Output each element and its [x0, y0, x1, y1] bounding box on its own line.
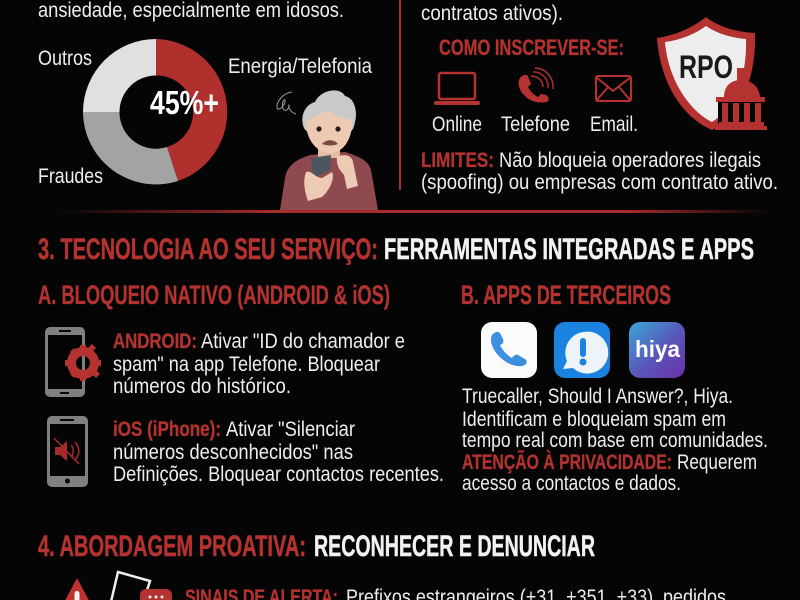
- icon: iPhone muted: [47, 416, 88, 487]
- icon: RPO shield with government building: [657, 17, 767, 130]
- privacy line 2: acesso a contactos e dados.: [462, 472, 681, 495]
- heading: section 4: [38, 530, 595, 563]
- heading part: red: 4. ABORDAGEM PROATIVA:: [38, 530, 306, 563]
- slice: Outros: [83, 39, 156, 112]
- privacy line 1: Requerem: [677, 451, 757, 474]
- icon: Truecaller app: [481, 322, 537, 378]
- heading: B: B. APPS DE TERCEIROS: [461, 280, 671, 310]
- apps line 1: Truecaller, Should I Answer?, Hiya.: [462, 385, 733, 408]
- icon: envelope: [596, 76, 631, 101]
- icon: android phone with gear: [45, 327, 101, 397]
- iOS line 2: números desconhecidos" nas: [113, 441, 353, 464]
- label: Online: Online: [432, 113, 482, 136]
- label: Energia/Telefonia: Energia/Telefonia: [228, 55, 372, 78]
- phone: [311, 155, 331, 178]
- icon: Hiya app: hiya: [635, 336, 680, 362]
- icon: Should I Answer app: [554, 322, 610, 378]
- alert signs text: [185, 586, 726, 600]
- face: [306, 110, 352, 153]
- horizontal divider: [60, 210, 770, 213]
- iOS label: iOS (iPhone):: [113, 418, 221, 441]
- android line 1: Ativar "ID do chamador e: [201, 330, 405, 353]
- android label: ANDROID:: [113, 330, 197, 353]
- building: [718, 100, 764, 124]
- label: Email: Email.: [590, 113, 638, 136]
- heading part: white: RECONHECER E DENUNCIAR: [314, 530, 595, 563]
- android text: [113, 330, 405, 398]
- text: active contracts: contratos ativos).: [421, 2, 563, 25]
- sweater: [280, 152, 378, 210]
- icon: warning triangle: [62, 578, 92, 600]
- iOS text: [113, 418, 444, 486]
- scribble: [277, 92, 296, 114]
- iOS line 1: Ativar "Silenciar: [226, 418, 355, 441]
- heading: section 3: [38, 233, 754, 266]
- limits label: LIMITES:: [421, 149, 494, 172]
- label: Telefone: Telefone: [501, 113, 570, 136]
- icon: Hiya app: [629, 322, 685, 378]
- heading part: red: 3. TECNOLOGIA AO SEU SERVIÇO:: [38, 233, 378, 266]
- icon: telephone: [519, 68, 553, 103]
- vertical divider: [399, 0, 401, 190]
- limits line 1: Não bloqueia operadores ilegais: [499, 149, 761, 172]
- apps line 2: Identificam e bloqueiam spam em: [462, 408, 726, 431]
- donut value: 45%+: [150, 84, 219, 121]
- icon: laptop online: [436, 73, 478, 103]
- label: Outros: Outros: [38, 47, 92, 70]
- privacy label: ATENÇÃO À PRIVACIDADE:: [462, 451, 672, 474]
- slice: Fraudes: [83, 112, 178, 184]
- icon: phone with chat bubble: [110, 572, 172, 600]
- apps text: [462, 385, 768, 495]
- eyes and mouth: [316, 126, 322, 132]
- iOS line 3: Definições. Bloquear contactos recentes.: [113, 463, 444, 486]
- heading: como inscrever-se: COMO INSCREVER-SE:: [439, 35, 624, 60]
- label: Fraudes: Fraudes: [38, 165, 103, 188]
- donut chart: [83, 39, 227, 184]
- shield: [657, 17, 755, 130]
- hair: [302, 90, 356, 132]
- neck: [318, 142, 340, 158]
- icon: worried elderly woman with phone: [277, 90, 378, 210]
- heading: A: A. BLOQUEIO NATIVO (ANDROID & iOS): [38, 280, 390, 310]
- limits text: [421, 149, 778, 194]
- android line 3: números do histórico.: [113, 375, 291, 398]
- android line 2: spam" na app Telefone. Bloquear: [113, 353, 380, 376]
- hands: [304, 172, 333, 201]
- slice: Energia/Telefonia: [156, 39, 227, 181]
- shield label: RPO: [679, 49, 733, 85]
